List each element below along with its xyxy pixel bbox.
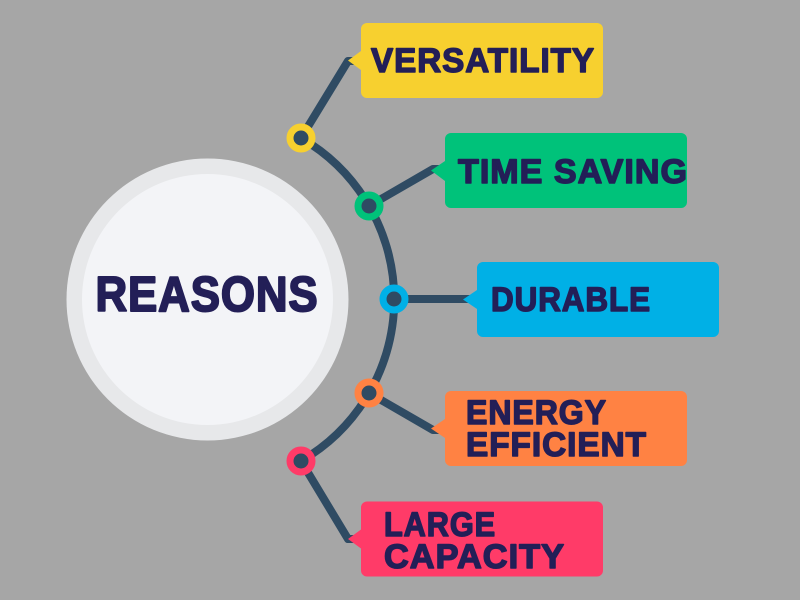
central circle: reasons	[66, 158, 348, 440]
callout: large capacity	[348, 502, 603, 576]
item: energy efficient	[358, 382, 687, 466]
heading: reasons: REASONS	[96, 268, 318, 322]
item: durable	[383, 262, 719, 337]
connector line: durable	[394, 295, 478, 303]
callout: durable	[463, 262, 719, 337]
label: versatility: VERSATILITY	[371, 42, 595, 80]
label: energy efficient: ENERGY	[466, 394, 607, 432]
item: time saving	[358, 133, 688, 217]
node: versatility	[290, 127, 312, 149]
connector line: versatility	[301, 61, 362, 138]
node: durable	[383, 288, 405, 310]
callout: time saving	[431, 133, 687, 208]
label: large capacity: CAPACITY	[384, 538, 565, 576]
connector line: energy efficient	[369, 393, 446, 430]
connector arc	[301, 138, 394, 461]
node: time saving	[358, 195, 380, 217]
node: energy efficient	[358, 382, 380, 404]
item: versatility	[290, 23, 603, 149]
item: large capacity	[290, 450, 603, 576]
connector line: large capacity	[301, 461, 362, 539]
callout: energy efficient	[431, 391, 687, 466]
label: time saving: TIME SAVING	[458, 153, 688, 191]
node: large capacity	[290, 450, 312, 472]
label: large capacity: LARGE	[384, 506, 496, 544]
label: durable: DURABLE	[491, 281, 651, 319]
label: energy efficient: EFFICIENT	[466, 426, 647, 464]
callout: versatility	[348, 23, 603, 98]
connector line: time saving	[369, 169, 446, 206]
